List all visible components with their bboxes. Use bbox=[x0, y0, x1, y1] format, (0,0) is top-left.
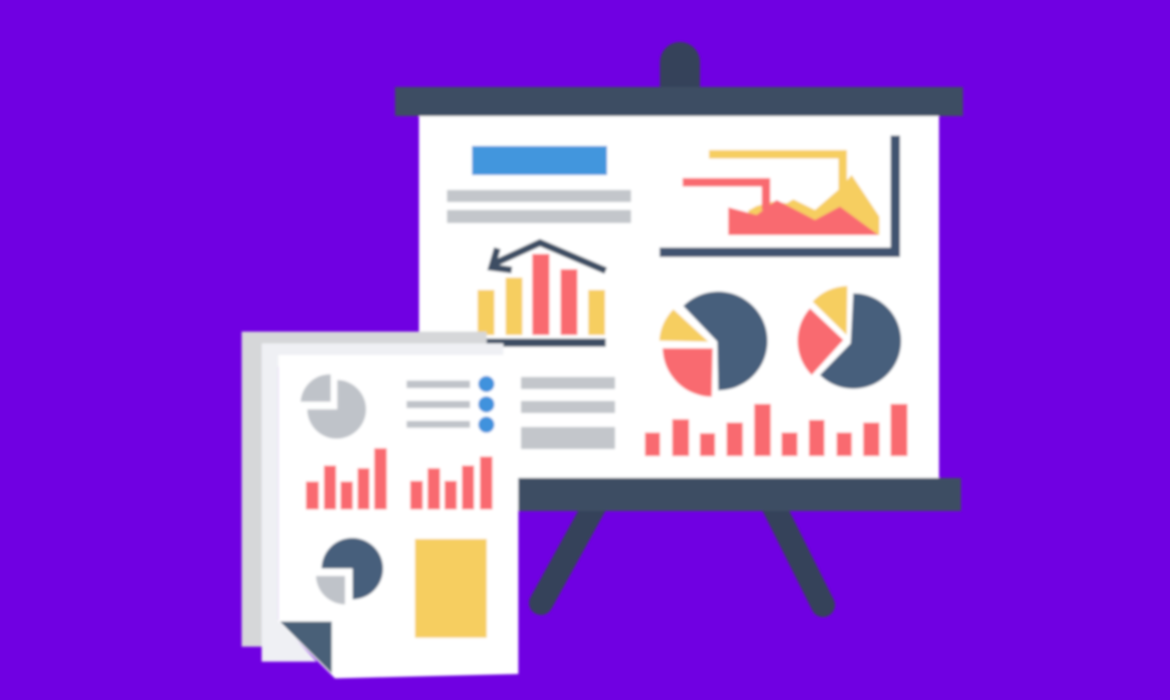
heading block: blue title bbox=[472, 146, 607, 175]
front sheet bbox=[278, 355, 518, 678]
yellow block bbox=[415, 539, 487, 638]
yellow area series bbox=[748, 175, 879, 235]
folded corner bbox=[280, 622, 332, 673]
icon: easel legs bbox=[541, 505, 823, 605]
text block: gray lines bbox=[447, 190, 631, 223]
panel: presentation screen bbox=[419, 112, 939, 480]
chart: right report bars bbox=[410, 457, 492, 509]
yellow and red bars bbox=[478, 254, 605, 335]
text lines with blue bullets bbox=[407, 376, 494, 433]
red area series bbox=[728, 200, 878, 235]
bottom roller bar bbox=[500, 478, 961, 511]
icon: dark pie with gray slice bbox=[316, 538, 383, 604]
chart: bar chart with arrow bbox=[478, 243, 606, 347]
chart: area chart with callouts bbox=[660, 136, 895, 252]
left pie bbox=[659, 292, 767, 397]
baseline bbox=[485, 339, 606, 347]
chart axes bbox=[660, 136, 895, 252]
red callout line bbox=[683, 182, 766, 210]
middle sheet bbox=[262, 343, 503, 662]
back sheet bbox=[242, 332, 487, 647]
right pie bbox=[798, 286, 901, 389]
chart: two pie charts bbox=[645, 286, 907, 456]
chart: left report bars bbox=[306, 448, 387, 509]
text block: gray bars beside report bbox=[521, 377, 615, 449]
icon: gray pie bbox=[301, 374, 366, 439]
red bar row bbox=[645, 404, 907, 456]
arrow bbox=[492, 243, 606, 271]
icon: hanging knob bbox=[660, 42, 700, 90]
panel: report document bbox=[242, 332, 518, 678]
yellow callout line bbox=[709, 154, 843, 190]
top roller bar bbox=[395, 87, 963, 116]
